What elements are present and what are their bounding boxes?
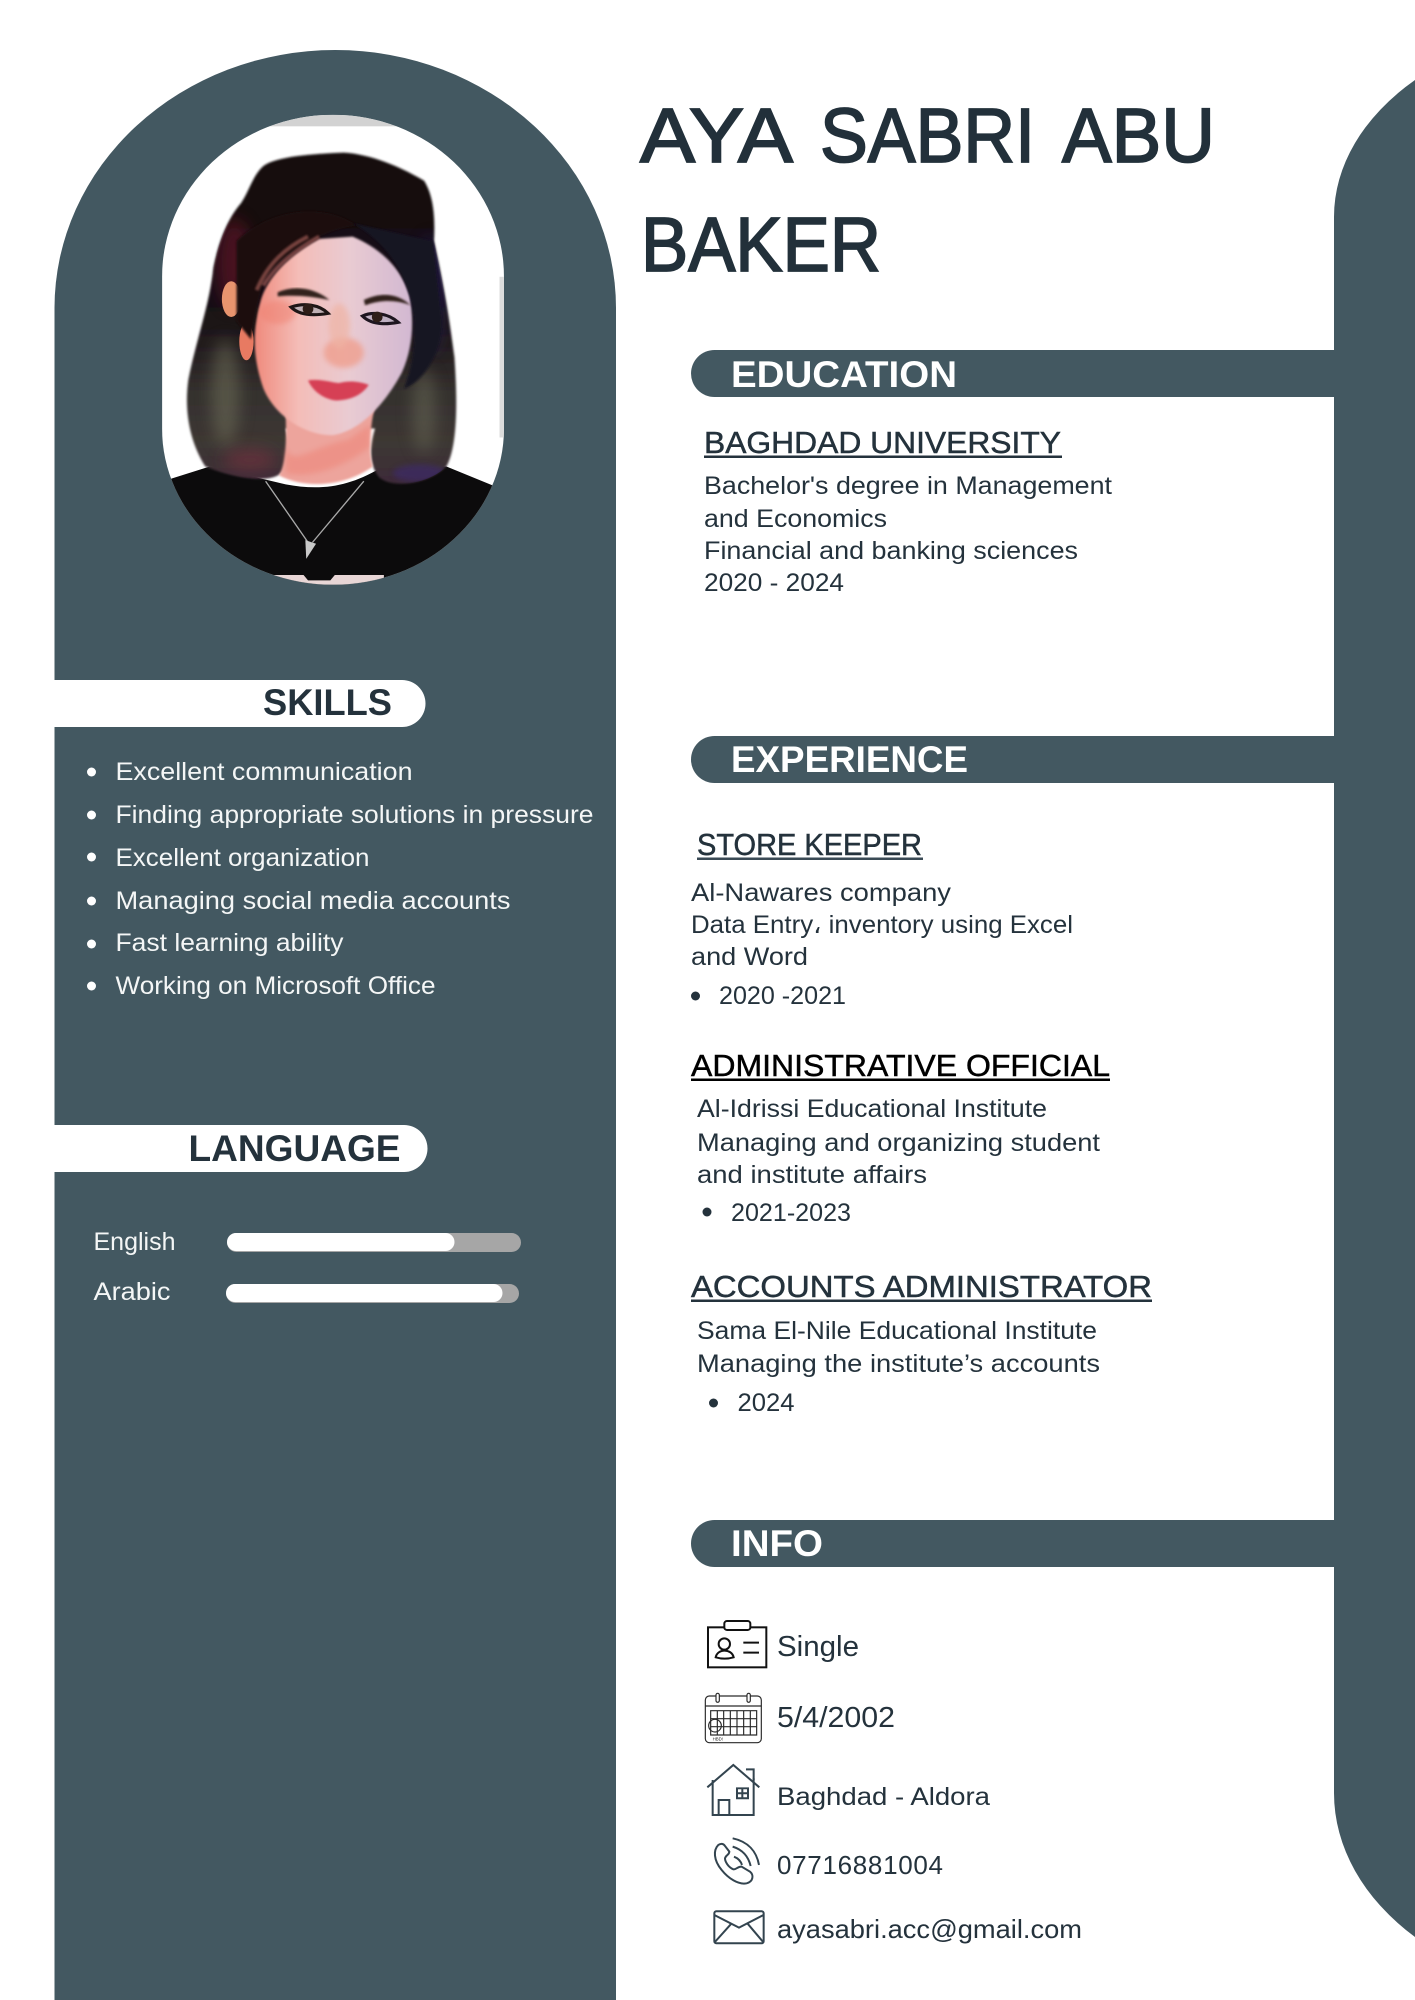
- education details: Financial and banking sciences: [704, 537, 1078, 565]
- arabic level bar: Arabic: [94, 1278, 170, 1306]
- skills list: [87, 758, 594, 1000]
- job: store keeper: 2020 -2021: [719, 982, 846, 1010]
- job: store keeper: Al-Nawares company: [691, 879, 952, 907]
- left arched panel: [54, 50, 616, 2000]
- info heading: INFO: [731, 1523, 823, 1564]
- eyes: [291, 305, 328, 315]
- panel: education: [691, 350, 1334, 597]
- address: Baghdad - Aldora: [777, 1783, 990, 1811]
- education details: [704, 472, 1112, 597]
- job: accounts administrator: 2024: [738, 1389, 795, 1417]
- lips: [308, 380, 369, 400]
- job: store keeper: Data Entry، inventory using Excel: [691, 911, 1073, 939]
- language heading pill: [54, 1125, 427, 1172]
- email: ayasabri.acc@gmail.com: [777, 1914, 1082, 1944]
- icon: id badge: [708, 1621, 766, 1667]
- english level bar: English: [94, 1228, 176, 1256]
- panel: skills: [54, 680, 594, 1000]
- title: SABRI: [820, 93, 1035, 179]
- education details: Bachelor's degree in Management: [704, 472, 1112, 500]
- job: store keeper: [691, 827, 1073, 1010]
- panel: experience: [691, 736, 1334, 1417]
- icon: calendar: HBD!: [713, 1737, 723, 1742]
- job: store keeper: STORE KEEPER: [697, 827, 922, 862]
- skills list: Managing social media accounts: [116, 887, 510, 915]
- job: administrative official: [691, 1048, 1110, 1227]
- icon: house: [707, 1765, 759, 1815]
- job: store keeper: and Word: [691, 943, 808, 971]
- language heading: LANGUAGE: [188, 1128, 400, 1169]
- face: [255, 237, 412, 435]
- shirt: [167, 466, 498, 589]
- job: accounts administrator: [691, 1269, 1152, 1417]
- experience heading: EXPERIENCE: [731, 739, 968, 780]
- job: administrative official: and institute affairs: [697, 1161, 927, 1189]
- job: administrative official: 2021-2023: [731, 1199, 851, 1227]
- bangs: [234, 224, 342, 340]
- shirt print: [274, 575, 384, 585]
- info heading bar: [691, 1520, 1334, 1567]
- arabic level bar: [94, 1278, 519, 1306]
- portrait photo: [162, 115, 504, 589]
- right curved panel: [1334, 80, 1415, 1937]
- skills list: Excellent organization: [116, 844, 370, 872]
- icon: calendar: [705, 1693, 761, 1743]
- skills list: Excellent communication: [116, 758, 412, 786]
- date of birth: 5/4/2002: [777, 1702, 895, 1734]
- job: accounts administrator: ACCOUNTS ADMINISTRATOR: [691, 1269, 1152, 1304]
- panel: language: [54, 1125, 521, 1306]
- job: administrative official: Managing and organizing student: [697, 1129, 1100, 1157]
- icon: phone: [715, 1838, 759, 1884]
- skills heading pill: [54, 680, 426, 727]
- necklace: [266, 481, 364, 542]
- neck: [279, 406, 375, 484]
- title: BAKER: [641, 202, 881, 288]
- skills list: Working on Microsoft Office: [116, 972, 436, 1000]
- university name: BAGHDAD UNIVERSITY: [704, 425, 1061, 460]
- phone number: 07716881004: [777, 1850, 943, 1880]
- icon: envelope: [714, 1911, 764, 1943]
- hair: [187, 153, 456, 484]
- face shading: [324, 337, 364, 368]
- education details: 2020 - 2024: [704, 569, 844, 597]
- title: [640, 93, 1215, 288]
- panel: info: [691, 1520, 1334, 1944]
- english level bar: [94, 1228, 521, 1256]
- job: administrative official: ADMINISTRATIVE OFFICIAL: [691, 1048, 1110, 1083]
- marital status: Single: [777, 1631, 859, 1663]
- ear: [222, 281, 241, 317]
- job: accounts administrator: Sama El-Nile Educational Institute: [697, 1317, 1097, 1345]
- eyebrows: [278, 288, 329, 300]
- education heading bar: [691, 350, 1334, 397]
- job: administrative official: Al-Idrissi Educational Institute: [697, 1095, 1047, 1123]
- pendant: [305, 540, 316, 559]
- hair tints: [211, 219, 446, 482]
- education heading: EDUCATION: [731, 354, 957, 395]
- title: ABU: [1062, 93, 1215, 179]
- title: AYA: [640, 93, 794, 179]
- job: accounts administrator: Managing the institute’s accounts: [697, 1350, 1100, 1378]
- skills list: Finding appropriate solutions in pressure: [116, 801, 594, 829]
- education details: and Economics: [704, 505, 887, 533]
- experience heading bar: [691, 736, 1334, 783]
- skills heading: SKILLS: [263, 682, 392, 723]
- skills list: Fast learning ability: [116, 929, 344, 957]
